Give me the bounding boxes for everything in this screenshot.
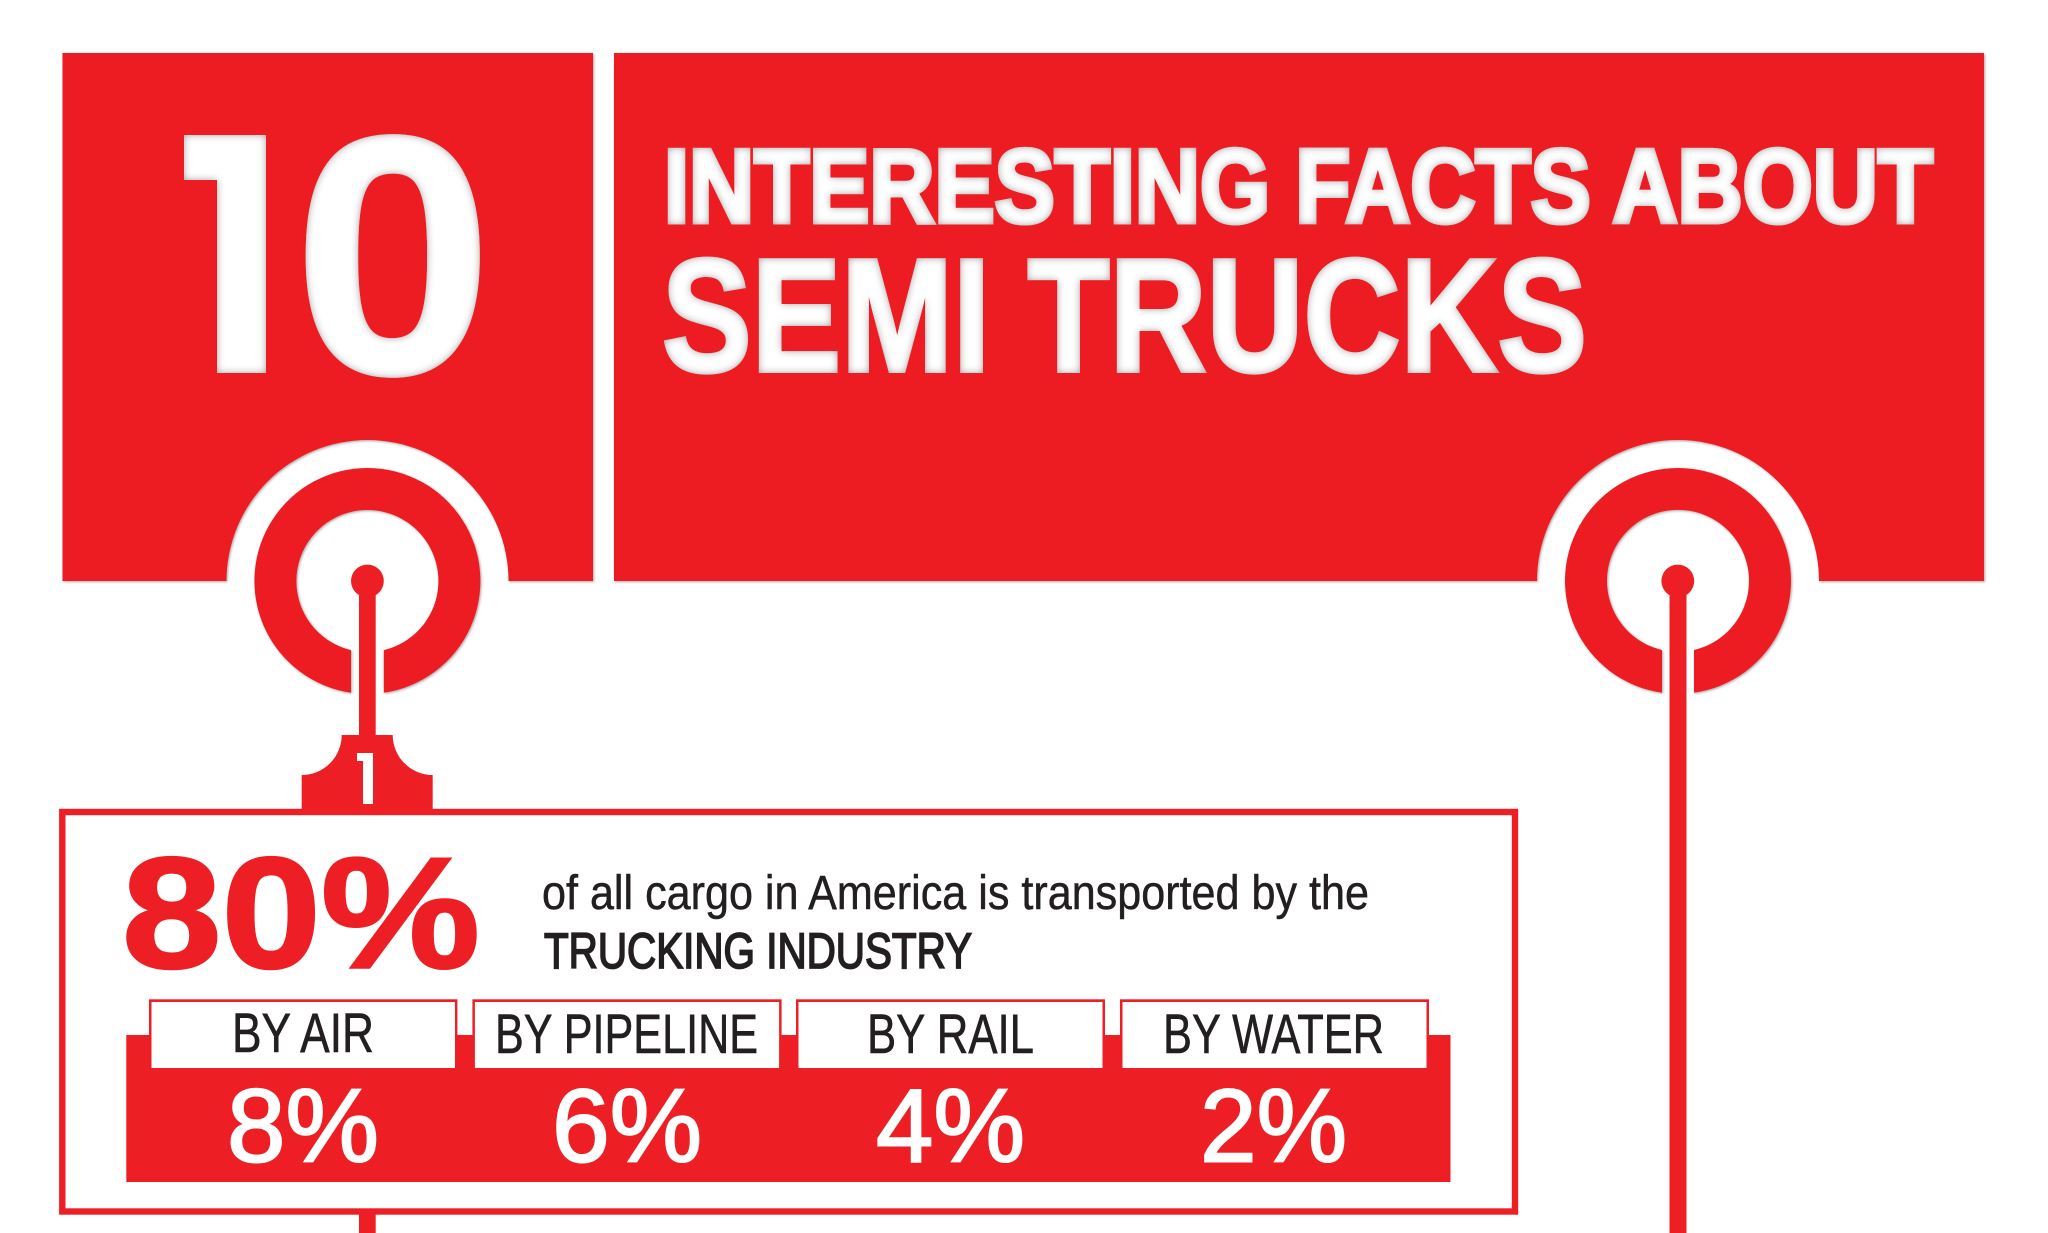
fact text line 1: of all cargo in America is transported by the xyxy=(542,867,1369,920)
value: 2%: 2% xyxy=(1200,1068,1347,1184)
panel: truck trailer xyxy=(614,53,1984,581)
tab: by air: BY AIR xyxy=(232,1001,374,1064)
fact text xyxy=(542,867,1369,979)
number tag 1 xyxy=(302,735,433,809)
value: 8%: 8% xyxy=(227,1068,379,1184)
heading number: 10: 1 xyxy=(136,62,328,447)
tab: by pipeline: BY PIPELINE xyxy=(495,1002,758,1065)
tab: by rail: BY RAIL xyxy=(867,1002,1034,1065)
icon: right wheel xyxy=(1565,468,1791,1233)
title line 2: SEMI TRUCKS xyxy=(662,226,1587,406)
values xyxy=(227,1068,1347,1184)
panel: truck cab xyxy=(62,53,593,581)
connector stem below fact 1 xyxy=(359,1214,376,1233)
tab: by air xyxy=(149,999,457,1068)
heading number: 10 xyxy=(184,134,480,378)
value: 6%: 6% xyxy=(552,1068,702,1184)
red stats bar xyxy=(126,1035,1450,1182)
value: 4%: 4% xyxy=(876,1068,1025,1184)
panel: fact 1 xyxy=(62,812,1515,1212)
number tag 1: 1 xyxy=(345,737,387,820)
big stat: 80%: 80% xyxy=(122,826,480,1002)
tab: by rail xyxy=(796,999,1105,1068)
tab: by water: BY WATER xyxy=(1163,1002,1384,1065)
heading number: 10: 0 xyxy=(293,66,493,446)
icon: left wheel xyxy=(254,468,480,741)
fact text line 2: TRUCKING INDUSTRY xyxy=(544,923,972,979)
title xyxy=(662,129,1933,406)
